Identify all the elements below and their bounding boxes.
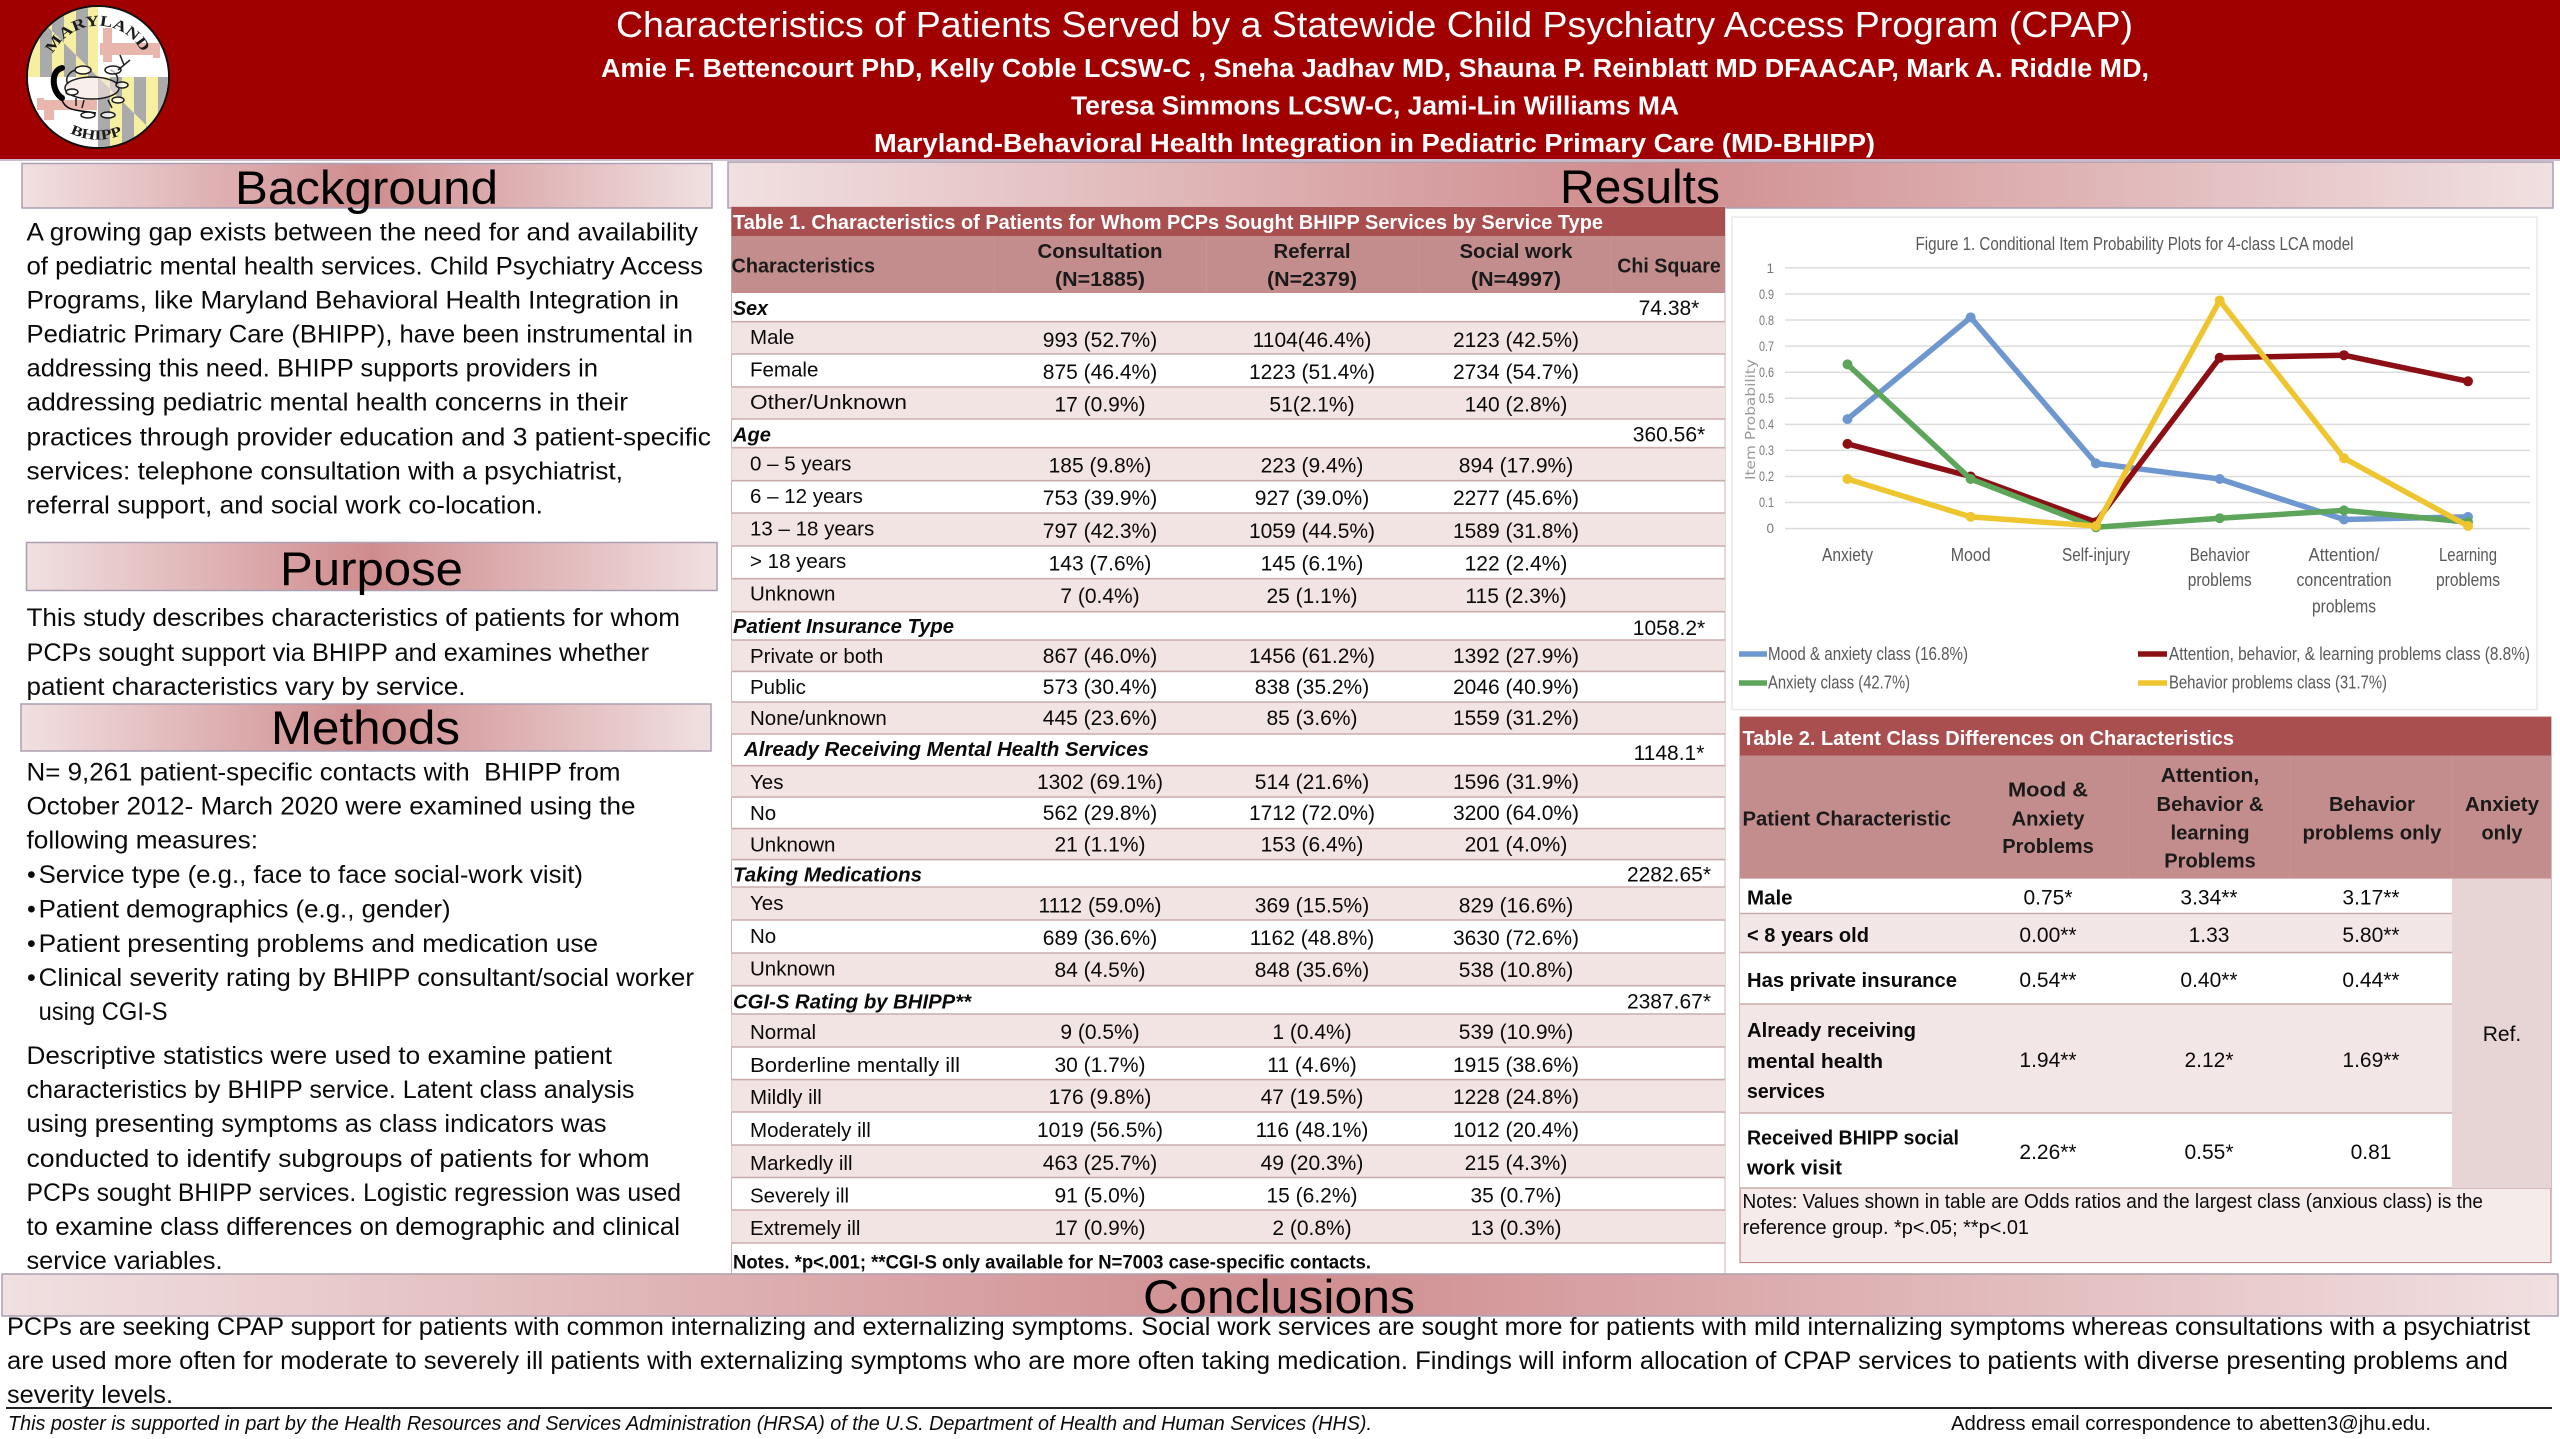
y axis tick labels: 0.5 [1759,391,1774,406]
table 1 column headers: (N=4997) [1471,268,1561,291]
rows: taking medications: 848 (35.6%) [1255,959,1369,982]
table 2 column headers: Anxiety [2012,808,2085,830]
authors line 2: Teresa Simmons LCSW-C, Jami-Lin Williams MA [1071,92,1679,120]
table 1 title bar: Table 1. Characteristics of Patients for Whom PCPs Sought BHIPP Services by Service Type [733,211,1603,234]
rows: CGI-S rating: Extremely ill [750,1217,860,1240]
row: received social work visit: 2.26** [2019,1141,2077,1164]
x axis category labels: Anxiety [1822,545,1873,565]
row: received social work visit: 0.81 [2351,1141,2391,1164]
text block: background: addressing pediatric mental health concerns in their [26,388,628,416]
text block: methods measures: • [27,930,36,958]
text block: methods measures: • [27,861,36,889]
rows: already receiving mental health services: 1148.1* [1634,742,1704,765]
row: already receiving services: 2.12* [2184,1049,2234,1072]
rows: already receiving mental health services: Already Receiving Mental Health Services [743,738,1149,761]
rows: CGI-S rating: Markedly ill [750,1152,853,1175]
table 1 column headers: (N=1885) [1055,268,1145,291]
series: behavior problems class [1842,296,2473,531]
x axis category labels: Attention/ [2308,545,2380,565]
table 2 title bar: Table 2. Latent Class Differences on Characteristics [1742,727,2234,750]
rows: age: 7 (0.4%) [1060,585,1140,608]
rows: age: 894 (17.9%) [1459,455,1573,478]
rows: taking medications: 1112 (59.0%) [1039,895,1161,918]
row: already receiving services: 1.94** [2019,1049,2077,1072]
series: anxiety class [1842,359,2473,532]
rows: already receiving mental health services: 153 (6.4%) [1261,833,1363,856]
y axis tick labels: 0.3 [1759,443,1774,458]
row: already receiving services: mental health [1747,1050,1883,1073]
rows: sex: 2734 (54.7%) [1453,361,1579,384]
rows: already receiving mental health services [743,738,1704,856]
rows: patient insurance type: 1456 (61.2%) [1249,645,1375,668]
rows: patient insurance type: Patient Insurance Type [733,615,954,638]
table 2 column headers: learning [2170,822,2250,844]
y axis tick labels: 0.1 [1759,495,1774,510]
header band [0,0,2560,161]
row: private insurance: Has private insurance [1747,969,1957,992]
rows: sex: 140 (2.8%) [1465,394,1567,417]
chart legend: Anxiety class (42.7%) [1768,672,1910,692]
table 2 column headers: Anxiety [2465,793,2540,816]
rows: patient insurance type: 573 (30.4%) [1043,676,1157,699]
rows: patient insurance type: 1058.2* [1633,617,1705,640]
rows: patient insurance type: Private or both [750,645,883,668]
text block: methods measures [26,758,694,1026]
rows: CGI-S rating: 463 (25.7%) [1043,1152,1157,1175]
chart legend: Behavior problems class (31.7%) [2169,672,2387,692]
x axis category labels: Mood [1951,545,1991,565]
rows: already receiving mental health services: Yes [750,771,783,794]
text block: purpose: patient characteristics vary by service. [26,673,465,701]
rows: CGI-S rating: 11 (4.6%) [1267,1054,1357,1077]
chart legend [1739,644,2530,692]
text block: methods measures: • [27,964,36,992]
rows: CGI-S rating: 13 (0.3%) [1470,1217,1562,1240]
rows: CGI-S rating: 1228 (24.8%) [1453,1086,1579,1109]
rows: CGI-S rating: Severely ill [750,1184,849,1208]
row: male: Male [1747,887,1793,910]
rows: already receiving mental health services: 514 (21.6%) [1255,771,1369,794]
x axis category labels: Behavior [2190,545,2250,565]
rows: taking medications: 538 (10.8%) [1459,959,1573,982]
text block: methods measures: following measures: [26,826,258,854]
text block: purpose: PCPs sought support via BHIPP and examines whether [26,639,649,667]
text block: methods measures: October 2012- March 2020 were examined using the [26,792,636,820]
rows: CGI-S rating: 1019 (56.5%) [1037,1119,1163,1142]
rows: CGI-S rating: Moderately ill [750,1119,871,1142]
rows: CGI-S rating: CGI-S Rating by BHIPP** [733,991,972,1014]
footer: contact address: Address email correspondence to abetten3@jhu.edu. [1951,1413,2431,1435]
table 2 notes: Notes: Values shown in table are Odds ratios and the largest class (anxious class) is the [1742,1191,2483,1213]
rows: patient insurance type [733,615,1705,730]
text block: purpose: This study describes characteristics of patients for whom [26,604,680,632]
section heading: Conclusions [2,1270,2558,1323]
text block: background [26,218,711,520]
row: already receiving services: 1.69** [2342,1049,2400,1072]
table 2 column headers: Problems [2164,850,2256,872]
row: private insurance: 0.40** [2180,969,2238,992]
rows: age: 143 (7.6%) [1049,553,1151,576]
rows: age: 25 (1.1%) [1266,585,1358,608]
rows: sex: Other/Unknown [750,391,907,414]
text block: methods measures: Patient demographics (e.g., gender) [39,896,451,924]
rows: taking medications: 1162 (48.8%) [1250,927,1374,950]
rows: CGI-S rating [733,991,1711,1240]
section heading: Methods: Methods [271,701,460,754]
section heading: Background [22,161,712,214]
rows: CGI-S rating: Normal [750,1021,816,1044]
text block: methods analysis: PCPs sought BHIPP services. Logistic regression was used [26,1179,681,1207]
row: private insurance: 0.54** [2019,969,2077,992]
table 2 column headers: Attention, [2161,764,2259,787]
text block: background: practices through provider education and 3 patient-specific [26,424,711,452]
table 1 notes: Notes. *p<.001; **CGI-S only available for N=7003 case-specific contacts. [733,1252,1371,1274]
row: received social work visit: work visit [1746,1156,1842,1180]
text block: methods analysis [26,1042,681,1275]
rows: sex: 993 (52.7%) [1043,329,1157,352]
y axis tick labels: 0 [1766,521,1774,536]
rows: CGI-S rating: Mildly ill [750,1086,822,1109]
rows: already receiving mental health services: No [750,802,776,825]
rows: CGI-S rating: 1012 (20.4%) [1453,1119,1579,1142]
table 1 column headers: Consultation [1038,240,1162,263]
section heading: Background: Background [235,161,498,214]
rows: already receiving mental health services: 562 (29.8%) [1043,802,1157,825]
x axis category labels: problems [2436,570,2500,590]
rows: CGI-S rating: 1 (0.4%) [1272,1021,1352,1044]
figure 1: line chart panel [1732,217,2537,710]
footer: funding acknowledgement: This poster is supported in part by the Health Resources and Services Administration (HRSA) of the U.S. Department of Health and Human Services (HHS). [8,1413,1372,1435]
table 2 column headers: Behavior & [2156,793,2264,816]
rows: patient insurance type: None/unknown [750,707,887,730]
section heading: Purpose: Purpose [280,542,463,595]
rows: age: Age [732,424,771,447]
row: under 8 years: < 8 years old [1747,924,1869,947]
rows: age: 1589 (31.8%) [1453,520,1579,543]
rows: taking medications: Taking Medications [733,864,922,887]
text block: methods analysis: conducted to identify subgroups of patients for whom [26,1145,650,1173]
rows: taking medications: 3630 (72.6%) [1453,927,1579,950]
table 2 column headers: Problems [2002,835,2094,858]
row: received social work visit: Received BHIPP social [1747,1126,1959,1150]
rows: CGI-S rating: 47 (19.5%) [1261,1086,1363,1109]
rows: age: > 18 years [750,550,846,573]
rows: sex: 74.38* [1639,297,1699,320]
rows: taking medications: 2282.65* [1627,864,1711,887]
rows: CGI-S rating: 49 (20.3%) [1261,1152,1363,1175]
y axis tick labels [1759,261,1774,536]
rows: CGI-S rating: 2 (0.8%) [1272,1217,1352,1240]
row: male: 0.75* [2023,887,2073,910]
x axis category labels: Self-injury [2062,545,2130,565]
icon: Maryland BHIPP logo seal [26,5,170,149]
rows: age: 223 (9.4%) [1261,455,1363,478]
rows: taking medications: 829 (16.6%) [1459,895,1573,918]
rows: age [732,424,1705,608]
row: received social work visit: 0.55* [2184,1141,2234,1164]
reference column: Ref. [2483,1023,2521,1046]
reference column [2452,879,2551,1188]
y axis tick labels: 0.2 [1759,469,1774,484]
text block: methods measures: • [27,896,36,924]
rows: CGI-S rating: 1915 (38.6%) [1453,1054,1579,1077]
rows: patient insurance type: 867 (46.0%) [1043,645,1157,668]
row: under 8 years: 5.80** [2342,924,2400,947]
row: already receiving services [1747,1019,2400,1103]
rows: sex: 1223 (51.4%) [1249,361,1375,384]
table 2 column headers [1740,756,2551,879]
rows: CGI-S rating: 35 (0.7%) [1470,1184,1562,1208]
text block: background: services: telephone consultation with a psychiatrist, [26,458,623,486]
rows: patient insurance type: Public [750,676,806,699]
rows: taking medications: Unknown [750,958,835,980]
table 2 column headers: problems only [2302,822,2442,844]
series: mood and anxiety class [1842,312,2473,524]
rows: sex: 1104(46.4%) [1253,329,1371,352]
text block: methods analysis: characteristics by BHIPP service. Latent class analysis [26,1076,634,1104]
rows: taking medications: 369 (15.5%) [1255,895,1369,918]
poster title: Characteristics of Patients Served by a Statewide Child Psychiatry Access Program (CPAP) [616,4,2133,45]
row: male: 3.34** [2180,887,2238,910]
table 2 column headers: only [2482,822,2523,844]
program name: Maryland-Behavioral Health Integration in Pediatric Primary Care (MD-BHIPP) [874,130,1875,158]
row: already receiving services: Already receiving [1747,1019,1916,1042]
table 1 column headers: Chi Square [1617,254,1721,278]
x axis category labels: problems [2312,596,2376,616]
rows: CGI-S rating: Borderline mentally ill [750,1054,960,1077]
rows: sex [733,297,1699,417]
text block: methods measures: using CGI-S [39,998,168,1026]
row: private insurance [1747,969,2400,992]
table 2 notes [1742,1191,2483,1239]
rows: age: 2277 (45.6%) [1453,487,1579,510]
table 2: latent class differences [1740,717,2551,1263]
table 2 title bar [1740,717,2551,756]
rows: CGI-S rating: 17 (0.9%) [1054,1217,1146,1240]
rows: sex: 17 (0.9%) [1054,394,1146,417]
rows: CGI-S rating: 91 (5.0%) [1054,1184,1146,1208]
rows: age: 1059 (44.5%) [1249,520,1375,543]
rows: age: 145 (6.1%) [1261,553,1363,576]
table 1 column headers: Social work [1460,240,1573,263]
rows: already receiving mental health services: 201 (4.0%) [1465,833,1567,856]
rows: CGI-S rating: 9 (0.5%) [1060,1021,1140,1044]
rows: taking medications: No [750,925,776,948]
section heading: Results [728,160,2553,213]
y axis tick labels: 0.9 [1759,287,1774,302]
icon: Maryland BHIPP logo seal: MARYLAND [44,16,148,54]
rows: age: 927 (39.0%) [1255,487,1369,510]
rows: already receiving mental health services: 1596 (31.9%) [1453,771,1579,794]
text block: methods analysis: Descriptive statistics were used to examine patient [26,1042,612,1070]
rows: sex: Male [750,326,794,349]
authors line 1: Amie F. Bettencourt PhD, Kelly Coble LCSW-C , Sneha Jadhav MD, Shauna P. Reinblatt MD DFAACAP, Mark A. Riddle MD, [601,55,2149,83]
text block: background: Programs, like Maryland Behavioral Health Integration in [26,286,679,314]
text block: conclusions [7,1313,2530,1409]
row: under 8 years: 1.33 [2189,924,2229,947]
text block: background: addressing this need. BHIPP supports providers in [26,354,598,382]
table 1 column headers: (N=2379) [1267,268,1357,291]
rows: CGI-S rating: 30 (1.7%) [1054,1054,1146,1077]
text block: purpose [26,604,680,701]
rows: already receiving mental health services: 1712 (72.0%) [1249,802,1375,825]
rows: sex: Female [750,359,818,382]
rows: patient insurance type: 1392 (27.9%) [1453,645,1579,668]
rows: CGI-S rating: 116 (48.1%) [1256,1119,1368,1142]
rows: CGI-S rating: 176 (9.8%) [1049,1086,1151,1109]
table 1 column headers: Characteristics [732,254,875,278]
text block: methods analysis: service variables. [26,1247,222,1275]
text block: conclusions: severity levels. [7,1381,173,1409]
icon: telephone handset [54,68,96,113]
rows: taking medications: 84 (4.5%) [1054,959,1146,982]
text block: methods analysis: using presenting symptoms as class indicators was [26,1110,606,1138]
row: received social work visit [1746,1126,2391,1180]
y axis tick labels: 0.4 [1759,417,1774,432]
text block: conclusions: are used more often for moderate to severely ill patients with externalizing symptoms who are more often taking medication. Findings will inform allocation of CPAP services to patients with diverse presenting problems and [7,1347,2508,1375]
rows: age: 185 (9.8%) [1049,455,1151,478]
row: private insurance: 0.44** [2342,969,2400,992]
text block: methods measures: Clinical severity rating by BHIPP consultant/social worker [39,964,694,992]
rows: taking medications: 689 (36.6%) [1043,927,1157,950]
row: under 8 years [1747,924,2400,947]
rows: sex: Sex [733,297,770,320]
rows: patient insurance type: 445 (23.6%) [1043,707,1157,730]
rows: patient insurance type: 838 (35.2%) [1255,676,1369,699]
rows: CGI-S rating: 15 (6.2%) [1266,1184,1358,1208]
rows: age: 0 – 5 years [750,453,851,476]
x axis category labels: Learning [2439,545,2497,565]
rows: age: 122 (2.4%) [1465,553,1567,576]
series: attention, behavior and learning problems class [1842,350,2473,527]
section heading: Methods [21,701,711,754]
rows: CGI-S rating: 215 (4.3%) [1465,1152,1567,1175]
row: male [1747,887,2400,910]
rows: patient insurance type: 2046 (40.9%) [1453,676,1579,699]
rows: age: 13 – 18 years [750,518,874,541]
table 1 column headers: Referral [1274,240,1350,263]
x axis category labels: concentration [2296,570,2392,590]
section heading: Purpose [26,542,717,595]
y axis tick labels: 0.6 [1759,365,1774,380]
chart title: Figure 1. Conditional Item Probability Plots for 4-class LCA model [1916,234,2354,254]
rows: patient insurance type: 1559 (31.2%) [1453,707,1579,730]
y axis tick labels: 1 [1766,261,1774,276]
text block: methods measures: Patient presenting problems and medication use [39,930,598,958]
section heading: Conclusions: Conclusions [1143,1270,1415,1323]
rows: taking medications [733,864,1711,982]
text block: conclusions: PCPs are seeking CPAP support for patients with common internalizing and externalizing symptoms. Social work services are sought more for patients with mild internalizing symptoms whereas consultations with a psychiatrist [7,1313,2530,1341]
text block: background: Pediatric Primary Care (BHIPP), have been instrumental in [26,320,693,348]
table 2 column headers: Behavior [2329,793,2415,816]
row: under 8 years: 0.00** [2019,924,2077,947]
y axis title: Item Probability [1743,359,1759,480]
rows: CGI-S rating: 539 (10.9%) [1459,1021,1573,1044]
chart legend: Mood & anxiety class (16.8%) [1768,644,1968,664]
table 1 column headers [732,236,1725,293]
rows: CGI-S rating: 2387.67* [1627,991,1711,1014]
rows: sex: 2123 (42.5%) [1453,329,1579,352]
table 2 column headers: Patient Characteristic [1742,808,1951,830]
rows: age: 360.56* [1633,424,1705,447]
rows: already receiving mental health services: Unknown [750,833,835,856]
rows: already receiving mental health services: 3200 (64.0%) [1453,802,1579,825]
rows: age: 6 – 12 years [750,485,863,508]
rows: patient insurance type: 85 (3.6%) [1266,707,1358,730]
rows: age: Unknown [750,583,835,606]
y axis tick labels: 0.7 [1759,339,1774,354]
rows: sex: 51(2.1%) [1269,394,1355,417]
text block: methods measures: Service type (e.g., face to face social-work visit) [39,861,583,889]
y axis tick labels: 0.8 [1759,313,1774,328]
row: male: 3.17** [2342,887,2400,910]
text block: background: A growing gap exists between the need for and availability [26,218,699,246]
x axis category labels [1822,545,2500,616]
text block: background: of pediatric mental health services. Child Psychiatry Access [26,252,703,280]
rows: already receiving mental health services: 21 (1.1%) [1054,833,1146,856]
x axis category labels: problems [2188,570,2252,590]
rows: already receiving mental health services: 1302 (69.1%) [1037,771,1163,794]
rows: sex: 875 (46.4%) [1043,361,1157,384]
rows: age: 753 (39.9%) [1043,487,1157,510]
rows: taking medications: Yes [750,892,783,915]
table 2 notes: reference group. *p<.05; **p<.01 [1742,1217,2029,1239]
section heading: Results: Results [1560,160,1720,213]
rows: age: 797 (42.3%) [1043,520,1157,543]
text block: methods analysis: to examine class differences on demographic and clinical [26,1213,680,1241]
text block: methods measures: N= 9,261 patient-specific contacts with BHIPP from [26,758,620,786]
row: already receiving services: services [1747,1080,1825,1103]
text block: background: referral support, and social work co-location. [26,492,543,520]
rows: age: 115 (2.3%) [1465,585,1567,608]
table 1: patient characteristics by service type [732,207,1725,1274]
table 2 column headers: Mood & [2008,778,2088,802]
icon: crab [65,55,130,118]
icon: Maryland BHIPP logo seal: BHIPP [70,124,120,140]
